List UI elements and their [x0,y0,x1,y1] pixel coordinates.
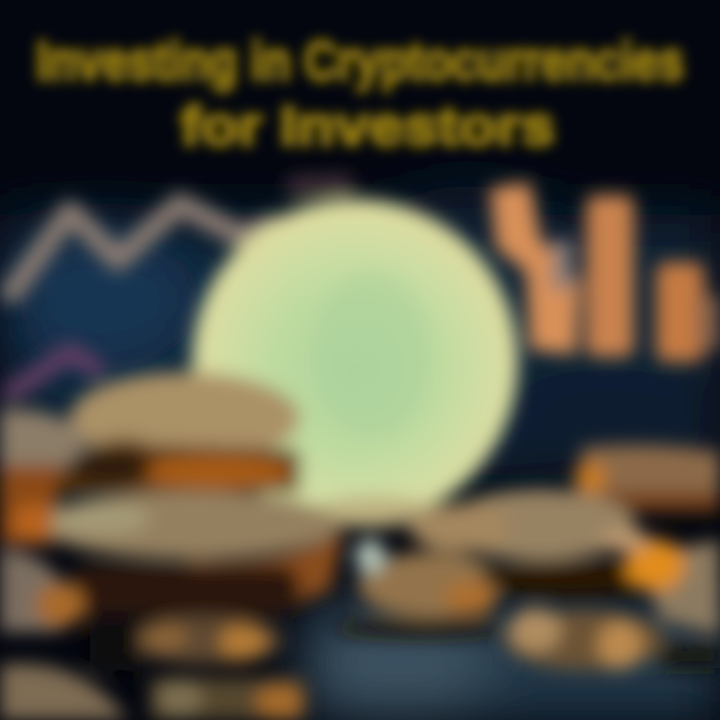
bar chart: falling orange candlesticks [490,182,720,362]
bitcoin coin [192,199,518,528]
right coin pile [335,445,720,670]
main blurred scene [0,182,720,720]
line chart: rising and falling trend [12,184,345,392]
left coin pile [0,372,345,720]
title line 2: for Investors [180,94,555,157]
coin symbol [312,270,432,440]
title [36,29,684,157]
background glows [0,186,720,720]
